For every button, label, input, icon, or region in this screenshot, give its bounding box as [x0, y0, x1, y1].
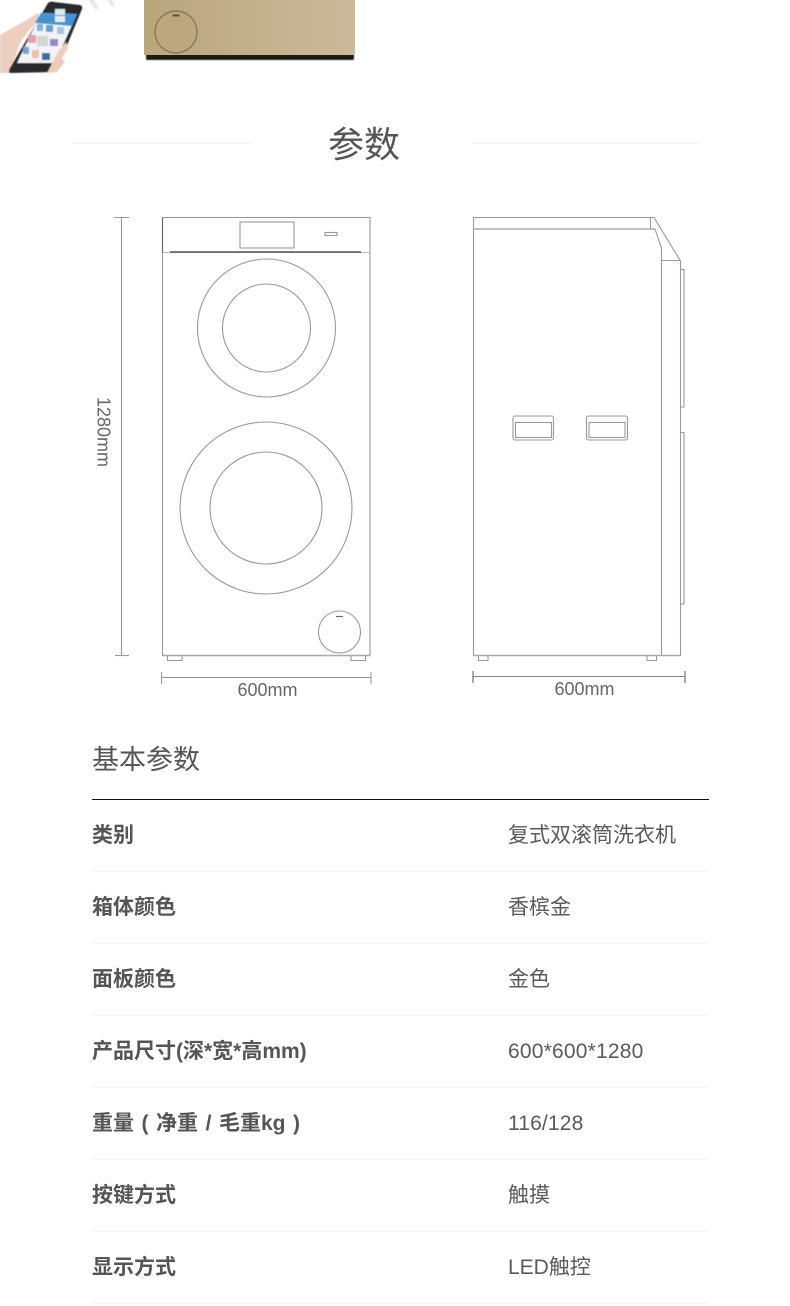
row: panel colour: 面板颜色 — [92, 968, 176, 991]
row: panel colour — [92, 968, 709, 1016]
row: buttons — [92, 1184, 709, 1232]
front width label: 600mm — [237, 680, 298, 700]
row: weight: 116/128 — [508, 1112, 583, 1135]
row: cabinet colour: 箱体颜色 — [92, 896, 176, 919]
row: buttons: 按键方式 — [92, 1184, 176, 1207]
row: dimensions: 产品尺寸(深*宽*高mm) — [92, 1040, 307, 1063]
side view — [473, 218, 685, 683]
table heading: 基本参数 — [92, 745, 200, 775]
row: display — [92, 1256, 709, 1304]
icon: gold machine base — [144, 0, 355, 60]
parameter table — [92, 824, 709, 1304]
front view — [114, 218, 371, 684]
icon: signal arcs — [90, 0, 113, 9]
phone screen — [17, 13, 77, 63]
height label: 1280mm — [94, 397, 114, 467]
row: display: 显示方式 — [92, 1256, 176, 1279]
row: display: LED触控 — [508, 1256, 591, 1279]
row: panel colour: 金色 — [508, 968, 550, 991]
row: cabinet colour — [92, 896, 709, 944]
phone body — [9, 2, 82, 73]
row: category: 复式双滚筒洗衣机 — [508, 824, 676, 847]
row: category — [92, 824, 709, 872]
icon: hand holding phone — [0, 2, 82, 73]
section title: 参数 — [328, 124, 400, 165]
row: category: 类别 — [92, 824, 134, 847]
row: weight — [92, 1112, 709, 1160]
row: cabinet colour: 香槟金 — [508, 896, 571, 919]
heading rule — [92, 799, 709, 800]
palm — [0, 13, 40, 73]
top product image: phone and gold machine — [0, 0, 355, 74]
row: dimensions: 600*600*1280 — [508, 1040, 644, 1063]
row: weight: 重量 ( 净重 / 毛重kg ) — [92, 1112, 300, 1135]
row: buttons: 触摸 — [508, 1184, 550, 1207]
row: dimensions — [92, 1040, 709, 1088]
side width label: 600mm — [554, 679, 615, 699]
dimension drawings — [94, 216, 686, 700]
fingers — [47, 42, 68, 73]
